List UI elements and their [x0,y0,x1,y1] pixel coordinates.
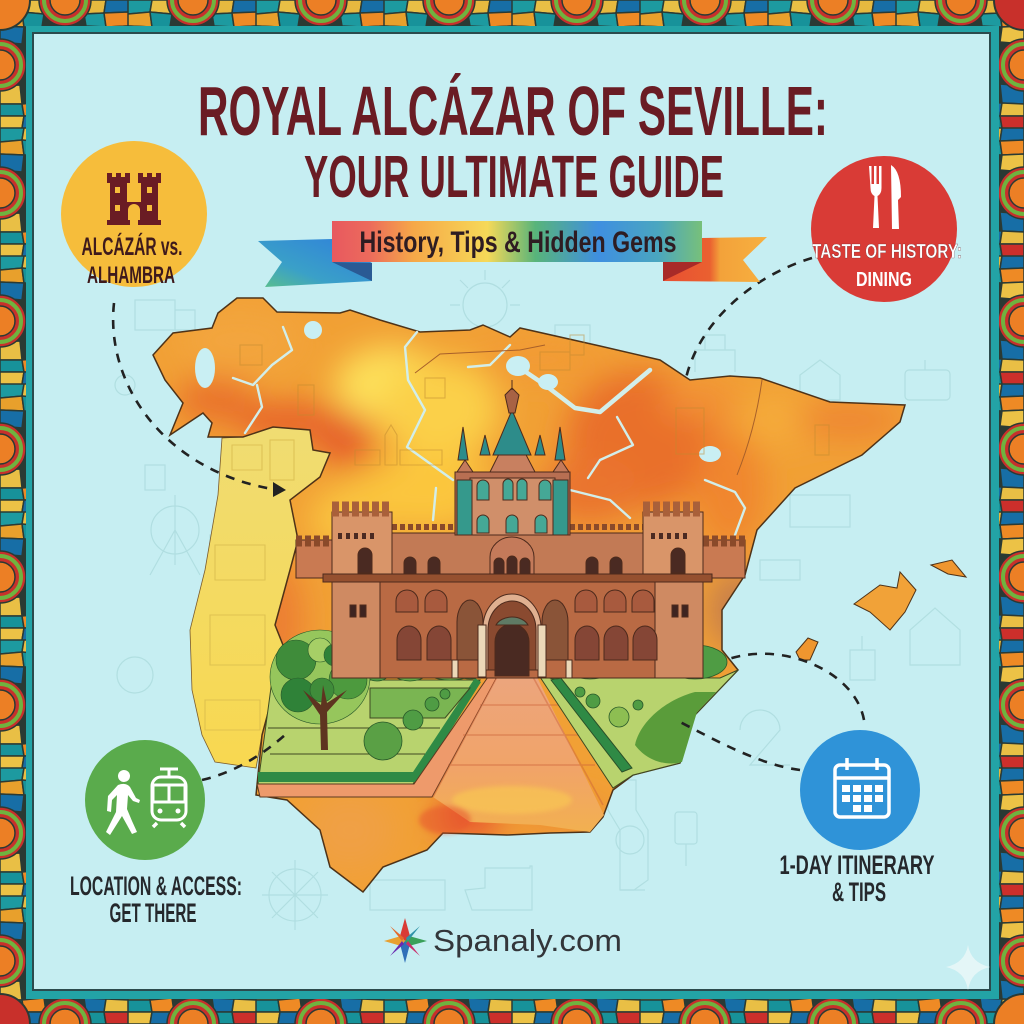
ribbon text: History, Tips & Hidden Gems [360,226,676,259]
upper body [392,533,643,578]
left tail [258,239,372,287]
callout: Alcázar vs Alhambra [61,141,207,289]
side tower windows lower [350,605,688,617]
ribbon banner [258,221,767,287]
central tower [455,472,570,535]
castle illustration [296,380,745,678]
right garden bed [540,670,738,788]
callout: dining: DINING [856,269,912,291]
right tail [663,237,767,282]
side walls [296,540,745,578]
lower facade [332,578,703,678]
faint map icons [240,335,829,465]
label: 1-DAY ITINERARY [780,850,934,880]
logo: Spanaly.com [384,918,622,963]
icon: tram [152,769,186,827]
icon: compass star [384,918,427,963]
columns [452,625,572,678]
icon: fork and knife [869,165,901,229]
callout: dining [811,156,962,302]
left tower [332,512,392,578]
callout: location and access: GET THERE [110,898,196,928]
rivers and lakes [233,327,745,535]
title: YOUR ULTIMATE GUIDE [304,144,724,210]
right tower [643,512,703,578]
garden [257,630,738,834]
cornice [323,574,712,582]
lower arch row [397,626,657,660]
upper arch row [396,590,654,612]
tower windows central [477,479,551,533]
Portugal [190,427,330,768]
Spain outline [153,298,905,892]
logo: Spanaly.com: Spanaly.com [433,923,622,958]
callout: dining: TASTE OF HISTORY: [812,241,962,263]
islands [854,572,916,630]
route: location [202,735,285,780]
tower windows [358,548,685,573]
callout: Alcázar vs Alhambra: ALCÁZÁR vs. [82,232,182,261]
label: LOCATION & ACCESS: [70,871,242,901]
icon: castle [107,173,161,225]
shrubs along facade [362,645,727,760]
tree [270,630,370,750]
icon: calendar [835,758,889,817]
door [495,624,529,676]
central arch [483,594,541,670]
callout: itinerary [780,730,934,907]
route: Alcázar vs Alhambra [113,303,272,489]
route: itinerary [680,722,800,770]
callout: Alcázar vs Alhambra: ALHAMBRA [87,262,175,289]
title [198,72,828,210]
flanking arches [457,600,568,660]
icon: walking person [106,770,140,835]
faint background line icons [115,270,960,930]
central path [433,677,604,832]
arrow head [273,482,286,497]
plaza base [257,677,497,797]
left garden bed [258,680,480,784]
route: itinerary to islands [726,654,864,720]
map of Iberia [150,290,966,900]
dashed routes [113,258,864,780]
callout: location and access [70,740,242,928]
callout: itinerary: & TIPS [832,877,886,907]
central gable and spires [490,428,535,472]
route: dining [686,258,812,378]
Spain watercolor [150,290,920,900]
sparkle mark [946,945,990,990]
portal above cornice [490,537,534,575]
